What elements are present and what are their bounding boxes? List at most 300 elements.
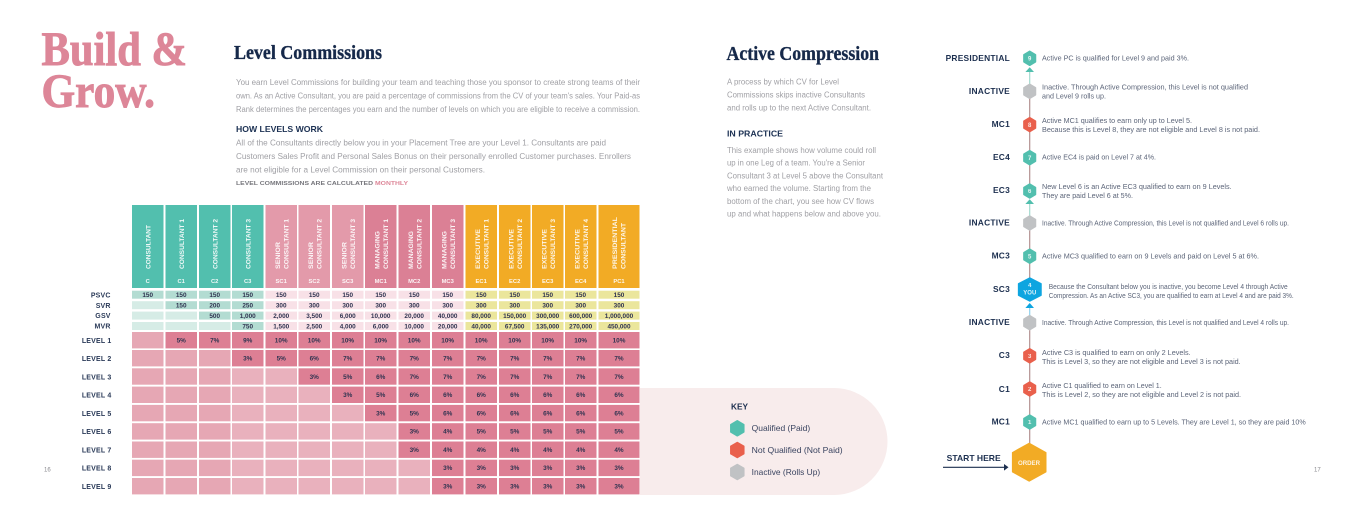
row: level 2: 7% xyxy=(477,356,486,362)
row: level 1: 9% xyxy=(243,338,253,344)
row: MVR: 270,000 xyxy=(569,323,593,330)
row: level 5: 6% xyxy=(543,410,553,417)
step: MC1 level 8 xyxy=(992,118,1260,134)
row: level 2: 7% xyxy=(443,356,453,362)
row: level 6: 4% xyxy=(443,429,453,436)
row: level 3: 7% xyxy=(543,374,553,381)
text block: how levels work: Customers Sales Profit and Personal Sales Bonus on their personally enrolled Customer purchases. Enrollers xyxy=(236,152,631,161)
row: level 2 xyxy=(82,350,640,366)
key item: qualified: Qualified (Paid) xyxy=(752,424,810,433)
key item: inactive: Inactive (Rolls Up) xyxy=(752,468,820,477)
row: level 1: 10% xyxy=(374,338,387,344)
text block: in practice: bottom of the chart, you see how CV flows xyxy=(727,197,874,206)
row: SVR xyxy=(96,301,639,310)
row: level 1: 10% xyxy=(613,338,626,344)
step: inactive above level 5: INACTIVE xyxy=(969,218,1010,228)
row: PSVC xyxy=(91,291,639,300)
row: MVR: MVR xyxy=(95,324,111,331)
key item: not qualified: Not Qualified (Not Paid) xyxy=(752,446,843,455)
row: level 3: 7% xyxy=(443,374,453,381)
row: SVR: 300 xyxy=(614,302,625,310)
key item: qualified xyxy=(731,421,810,436)
row: PSVC: 150 xyxy=(276,292,287,299)
step: SC3 you level 4: YOU xyxy=(1023,290,1036,296)
icon: order hexagon xyxy=(1012,443,1046,481)
step: MC3 level 5: Active MC3 qualified to earn on 9 Levels and paid on Level 5 at 6%. xyxy=(1042,254,1259,261)
row: level 7: 4% xyxy=(510,447,520,454)
icon: order hexagon: ORDER xyxy=(1018,460,1040,467)
row: GSV: 300,000 xyxy=(536,313,560,320)
row: PSVC: 150 xyxy=(409,292,420,299)
row: level 7: 4% xyxy=(443,447,453,454)
step: C1 level 2: 2 xyxy=(1028,387,1032,393)
row: level 7: 3% xyxy=(410,447,419,454)
step: inactive above level 8 xyxy=(969,84,1248,100)
row: GSV: 1,000 xyxy=(240,313,256,320)
table header row: CONSULTANT 1 xyxy=(284,219,290,269)
row: level 3: 5% xyxy=(343,374,353,381)
row: level 1: 10% xyxy=(475,338,488,344)
start here label and arrow: START HERE xyxy=(947,454,1001,463)
table header row: MANAGING xyxy=(408,231,415,269)
row: level 7: 4% xyxy=(576,447,586,454)
table header row: MC3 xyxy=(442,279,455,285)
row: level 1: 10% xyxy=(541,338,554,344)
row: level 5 xyxy=(82,405,640,421)
page number 16: 16 xyxy=(44,468,51,474)
row: SVR: 300 xyxy=(276,302,287,310)
row: PSVC: 150 xyxy=(176,292,187,299)
step: SC3 you level 4: Because the Consultant below you is inactive, you become Level 4 through Active xyxy=(1049,284,1288,291)
table header row: PC1 xyxy=(613,279,625,285)
arrow: blue below you xyxy=(1025,303,1034,308)
table header row: CONSULTANT 3 xyxy=(350,219,357,269)
row: MVR: 67,500 xyxy=(505,323,525,330)
note: calculated monthly: MONTHLY xyxy=(375,181,408,187)
text block: active compression intro: A process by which CV for Level xyxy=(727,78,839,87)
row: level 9 xyxy=(82,478,640,494)
title: Build & xyxy=(42,24,187,76)
table header row: SC1 xyxy=(276,279,288,285)
table header row xyxy=(132,205,640,288)
row: level 2: 5% xyxy=(277,356,286,362)
row: GSV: 40,000 xyxy=(438,313,458,320)
table header row: EXECUTIVE xyxy=(508,229,516,269)
row: level 3: 7% xyxy=(576,374,586,381)
row: MVR: 750 xyxy=(242,323,253,330)
step: EC3 level 6: They are paid Level 6 at 5%. xyxy=(1042,193,1133,200)
title: Grow. xyxy=(42,66,155,118)
text block: level commissions intro: Rank determines the percentages you earn and the number of levels on which you are eligible to receive a commission. xyxy=(236,105,640,114)
start here label and arrow xyxy=(943,454,1008,471)
row: level 6: 5% xyxy=(614,429,624,436)
row: level 4: 6% xyxy=(477,392,486,399)
row: level 2: 6% xyxy=(310,356,319,362)
step: MC1 level 8: MC1 xyxy=(992,119,1010,129)
row: PSVC: 150 xyxy=(242,292,253,299)
text block: in practice: up in one Leg of a team. You're a Senior xyxy=(727,159,865,168)
row: level 2: 3% xyxy=(243,356,253,362)
timeline connector lines xyxy=(1029,70,1031,445)
table header row: CONSULTANT 2 xyxy=(416,219,424,269)
row: level 2: 7% xyxy=(376,356,386,362)
row: level 6 xyxy=(82,423,640,440)
row: SVR: 300 xyxy=(342,302,353,310)
text block: in practice: This example shows how volume could roll xyxy=(727,146,876,155)
row: level 9: 3% xyxy=(543,483,553,490)
step: EC4 level 7 xyxy=(993,151,1156,165)
row: GSV xyxy=(95,312,639,320)
row: level 4: 5% xyxy=(376,392,386,399)
step: inactive above level 5 xyxy=(969,216,1289,230)
row: level 7: 4% xyxy=(614,447,624,454)
row: level 2: 7% xyxy=(343,356,353,362)
step: presidential level 9 xyxy=(946,51,1189,65)
row: level 4: 3% xyxy=(343,392,353,399)
row: level 7: 4% xyxy=(477,447,486,454)
row: PSVC: 150 xyxy=(442,292,453,299)
step: MC3 level 5 xyxy=(992,249,1259,263)
row: level 5: 6% xyxy=(614,410,624,417)
step: MC1 level 1: MC1 xyxy=(992,417,1010,427)
row: level 4: 6% xyxy=(443,392,453,399)
table header row: SC3 xyxy=(342,279,354,285)
table header row: CONSULTANT 3 xyxy=(550,219,557,269)
row: level 2: 7% xyxy=(410,356,419,362)
table header row: C3 xyxy=(244,279,252,285)
row: GSV: 500 xyxy=(209,313,220,320)
row: level 3: 7% xyxy=(614,374,624,381)
row: level 4: 6% xyxy=(543,392,553,399)
table header row: SENIOR xyxy=(342,242,348,269)
table header row: PRESIDENTIAL xyxy=(612,217,619,269)
chart: rank table xyxy=(82,205,640,494)
row: level 1: 10% xyxy=(508,338,521,344)
row: level 4: 6% xyxy=(614,392,624,399)
row: level 9: 3% xyxy=(576,483,586,490)
table header row: C xyxy=(146,279,151,285)
step: MC3 level 5: 5 xyxy=(1028,254,1032,260)
step: MC1 level 8: 8 xyxy=(1028,123,1032,129)
step: C3 level 3: 3 xyxy=(1028,354,1032,360)
table header row: EC3 xyxy=(542,279,554,285)
row: level 1: 10% xyxy=(341,338,354,344)
table header row: CONSULTANT 1 xyxy=(179,219,186,269)
row: level 2: 7% xyxy=(510,356,520,362)
text block: level commissions intro: You earn Level Commissions for building your team and teaching those you sponsor to create strong teams of their xyxy=(236,78,640,87)
text block: how levels work xyxy=(236,138,631,174)
row: level 5: 3% xyxy=(376,410,386,417)
step: EC3 level 6: New Level 6 is an Active EC3 qualified to earn on 9 Levels. xyxy=(1042,184,1232,191)
step: C3 level 3: C3 xyxy=(999,350,1010,360)
row: level 2: 7% xyxy=(543,356,553,362)
row: PSVC: 150 xyxy=(575,292,586,299)
row: level 1: LEVEL 1 xyxy=(82,338,112,345)
step: inactive above level 3 xyxy=(969,316,1289,330)
row: level 2: LEVEL 2 xyxy=(82,356,112,363)
text block: active compression intro xyxy=(727,78,871,112)
heading: level commissions: Level Commissions xyxy=(234,42,382,64)
heading: in practice: IN PRACTICE xyxy=(727,130,784,138)
row: SVR: 250 xyxy=(242,302,253,310)
table header row: CONSULTANT 3 xyxy=(450,219,457,269)
row: MVR: 2,500 xyxy=(306,323,323,330)
table header row: C1 xyxy=(177,279,186,285)
step: MC3 level 5: MC3 xyxy=(992,250,1010,260)
row: PSVC: 150 xyxy=(375,292,386,299)
row: PSVC: 150 xyxy=(542,292,553,299)
row: level 8: 3% xyxy=(543,465,553,472)
row: SVR: 200 xyxy=(209,302,220,310)
page number 17: 17 xyxy=(1314,468,1321,474)
heading: how levels work: HOW LEVELS WORK xyxy=(236,125,323,134)
table header row: MC2 xyxy=(408,279,420,285)
row: level 4: 6% xyxy=(410,392,419,399)
row: SVR: 300 xyxy=(476,302,487,310)
step: SC3 you level 4: SC3 xyxy=(993,284,1010,294)
step: SC3 you level 4: 4 xyxy=(1028,283,1032,289)
chart: compression timeline xyxy=(943,51,1306,481)
step: inactive above level 8: Inactive. Through Active Compression, this Level is not qualified xyxy=(1042,84,1248,92)
row: GSV: 150,000 xyxy=(503,313,527,320)
table header row: MANAGING xyxy=(374,231,382,269)
table header row: MANAGING xyxy=(442,231,448,269)
note: calculated monthly: LEVEL COMMISSIONS ARE CALCULATED xyxy=(236,181,373,187)
row: level 9: 3% xyxy=(614,483,624,490)
row: level 7: 4% xyxy=(543,447,553,454)
table header row: EC2 xyxy=(509,279,520,285)
row: level 7 xyxy=(82,442,640,458)
row: MVR: 450,000 xyxy=(607,323,631,330)
row: MVR: 4,000 xyxy=(340,323,356,330)
row: level 1 xyxy=(82,332,640,348)
step: C1 level 2: This is Level 2, so they are not eligible and Level 2 is not paid. xyxy=(1042,392,1241,399)
row: level 1: 10% xyxy=(574,338,587,344)
row: PSVC: PSVC xyxy=(91,293,111,300)
row: level 3: 7% xyxy=(510,374,520,381)
row: level 8: 3% xyxy=(443,465,453,472)
table header row: CONSULTANT 3 xyxy=(246,219,252,269)
row: GSV: 6,000 xyxy=(340,313,356,320)
row: level 6: 5% xyxy=(477,429,486,436)
row: GSV: 1,000,000 xyxy=(605,313,634,320)
row: level 8: 3% xyxy=(614,465,624,472)
row: SVR: 300 xyxy=(375,302,386,310)
row: PSVC: 150 xyxy=(209,292,220,299)
row: SVR: 300 xyxy=(409,302,420,310)
row: GSV: 20,000 xyxy=(404,313,424,320)
table header row: MC1 xyxy=(375,279,388,285)
step: C1 level 2: C1 xyxy=(999,384,1010,394)
text block: active compression intro: and rolls up to the next Active Consultant. xyxy=(727,103,871,112)
table header row: EC1 xyxy=(476,279,488,285)
step: inactive above level 3: Inactive. Through Active Compression, this Level is not qualified and Level 4 rolls up. xyxy=(1042,320,1289,327)
row: level 3: LEVEL 3 xyxy=(82,374,112,381)
row: PSVC: 150 xyxy=(342,292,353,299)
table header row: EXECUTIVE xyxy=(542,229,548,269)
row: level 9: 3% xyxy=(443,483,453,490)
step: MC1 level 1 xyxy=(992,415,1306,429)
step: C3 level 3: Active C3 is qualified to earn on only 2 Levels. xyxy=(1042,350,1191,357)
row: level 1: 10% xyxy=(408,338,421,344)
step: inactive above level 8: INACTIVE xyxy=(969,86,1010,96)
row: level 5: 6% xyxy=(510,410,520,417)
row: level 3: 3% xyxy=(310,374,319,381)
row: MVR: 20,000 xyxy=(438,323,458,330)
step: presidential level 9: Active PC is qualified for Level 9 and paid 3%. xyxy=(1042,56,1189,62)
row: SVR: SVR xyxy=(96,303,111,310)
table header row: CONSULTANT 4 xyxy=(583,219,590,269)
row: level 6: 5% xyxy=(576,429,586,436)
row: SVR: 300 xyxy=(542,302,553,310)
row: level 9: LEVEL 9 xyxy=(82,484,112,491)
note: calculated monthly xyxy=(236,181,408,187)
row: SVR: 300 xyxy=(309,302,320,310)
row: level 3: 7% xyxy=(410,374,419,381)
step: SC3 you level 4 xyxy=(993,278,1294,301)
row: level 5: 6% xyxy=(576,410,586,417)
row: level 1: 10% xyxy=(308,338,321,344)
row: level 5: 5% xyxy=(410,410,419,417)
row: level 4: 6% xyxy=(510,392,520,399)
title xyxy=(42,24,187,118)
row: GSV: 600,000 xyxy=(569,313,593,320)
key heading: KEY xyxy=(731,402,749,412)
step: inactive above level 8: and Level 9 rolls up. xyxy=(1042,94,1106,100)
text block: in practice: up and what happens below and above you. xyxy=(727,210,881,219)
step: presidential level 9: 9 xyxy=(1028,56,1032,62)
row: SVR: 150 xyxy=(176,302,187,310)
row: PSVC: 150 xyxy=(309,292,320,299)
row: level 2: 7% xyxy=(614,356,624,362)
table header row: SENIOR xyxy=(275,242,282,269)
row: SVR: 300 xyxy=(442,302,453,310)
row: level 1: 10% xyxy=(275,338,288,344)
row: level 1: 10% xyxy=(441,338,454,344)
row: level 8: LEVEL 8 xyxy=(82,466,112,473)
row: GSV: 3,500 xyxy=(306,313,323,320)
row: PSVC: 150 xyxy=(142,292,153,299)
step: inactive above level 3: INACTIVE xyxy=(969,317,1010,327)
row: level 5: LEVEL 5 xyxy=(82,411,112,418)
key item: not qualified xyxy=(731,442,843,458)
row: level 6: 5% xyxy=(543,429,553,436)
row: PSVC: 150 xyxy=(476,292,487,299)
row: level 6: LEVEL 6 xyxy=(82,429,112,436)
row: SVR: 300 xyxy=(509,302,520,310)
row: GSV: 2,000 xyxy=(273,313,290,320)
step: C1 level 2 xyxy=(999,382,1241,399)
step: MC1 level 8: Because this is Level 8, they are not eligible and Level 8 is not paid. xyxy=(1042,127,1260,134)
table header row: EXECUTIVE xyxy=(574,229,582,269)
step: EC3 level 6: EC3 xyxy=(993,185,1010,195)
row: MVR: 135,000 xyxy=(536,323,560,330)
step: MC1 level 8: Active MC1 qualifies to earn only up to Level 5. xyxy=(1042,118,1192,125)
row: level 9: 3% xyxy=(510,483,520,490)
text block: in practice: Consultant 3 at Level 5 above the Consultant xyxy=(727,172,884,180)
row: level 4 xyxy=(82,387,640,403)
table header row: SENIOR xyxy=(308,242,315,269)
row: MVR: 1,500 xyxy=(273,323,290,330)
key item: inactive xyxy=(731,464,820,480)
row: level 3: 7% xyxy=(477,374,486,381)
heading: active compression: Active Compression xyxy=(726,43,879,65)
row: level 8 xyxy=(82,460,640,476)
row: level 4: 6% xyxy=(576,392,586,399)
step: EC3 level 6: 6 xyxy=(1028,189,1032,195)
row: level 5: 6% xyxy=(477,410,486,417)
step: SC3 you level 4: Compression. As an Active SC3, you are qualified to earn at Level 4 and are paid 3%. xyxy=(1049,293,1294,300)
row: level 6: 5% xyxy=(510,429,520,436)
panel: key xyxy=(640,388,887,495)
row: level 4: LEVEL 4 xyxy=(82,392,112,400)
text block: how levels work: All of the Consultants directly below you in your Placement Tree are your Level 1. Consultants are paid xyxy=(236,138,606,148)
table header row: CONSULTANT 2 xyxy=(316,219,324,269)
row: GSV: 10,000 xyxy=(371,313,391,320)
table header row: SC2 xyxy=(309,279,320,285)
text block: how levels work: are not eligible for a Level Commission on their personal Customers. xyxy=(236,166,485,174)
row: level 6: 3% xyxy=(410,429,419,436)
row: level 3 xyxy=(82,368,640,385)
row: GSV: 80,000 xyxy=(471,313,491,320)
row: level 9: 3% xyxy=(477,483,486,490)
table header row: CONSULTANT 2 xyxy=(212,219,220,269)
table header row: CONSULTANT 2 xyxy=(517,219,524,269)
step: MC1 level 1: Active MC1 qualified to earn up to 5 Levels. They are Level 1, so they are paid 10% xyxy=(1042,420,1306,427)
step: inactive above level 5: Inactive. Through Active Compression, this Level is not qualified and Level 6 rolls up. xyxy=(1042,220,1289,228)
row: PSVC: 150 xyxy=(509,292,520,299)
step: C1 level 2: Active C1 qualified to earn on Level 1. xyxy=(1042,383,1162,390)
table header row: CONSULTANT xyxy=(146,224,152,269)
table header row: EXECUTIVE xyxy=(475,229,482,269)
step: C3 level 3 xyxy=(999,349,1241,366)
table header row: EC4 xyxy=(575,279,587,285)
step: EC4 level 7: EC4 xyxy=(993,152,1010,162)
text block: in practice xyxy=(726,146,884,219)
row: PSVC: 150 xyxy=(614,292,625,299)
text block: active compression intro: Commissions skips inactive Consultants xyxy=(727,90,865,100)
step: EC4 level 7: Active EC4 is paid on Level 7 at 4%. xyxy=(1042,154,1156,161)
text block: in practice: who earned the volume. Starting from the xyxy=(726,184,872,193)
table header row: CONSULTANT xyxy=(620,222,628,269)
row: level 8: 3% xyxy=(576,465,586,472)
table header row: CONSULTANT 1 xyxy=(383,219,390,269)
row: level 8: 3% xyxy=(510,465,520,472)
row: level 2: 7% xyxy=(576,356,586,362)
table header row: C2 xyxy=(211,279,218,285)
row: level 7: LEVEL 7 xyxy=(82,447,112,454)
row: level 5: 6% xyxy=(443,410,453,417)
row: MVR: 10,000 xyxy=(404,323,424,330)
arrow: teal above level 5 inactive xyxy=(1025,199,1034,204)
table header row: CONSULTANT 1 xyxy=(484,219,490,269)
step: presidential level 9: PRESIDENTIAL xyxy=(946,53,1010,63)
row: GSV: GSV xyxy=(95,313,111,320)
row: MVR: 6,000 xyxy=(373,323,389,330)
step: C3 level 3: This is Level 3, so they are not eligible and Level 3 is not paid. xyxy=(1042,359,1241,366)
row: MVR: 40,000 xyxy=(471,323,491,330)
step: MC1 level 1: 1 xyxy=(1028,420,1032,426)
row: MVR xyxy=(95,322,639,331)
row: level 1: 5% xyxy=(177,338,186,344)
arrow: teal above inactive xyxy=(1025,67,1034,72)
row: level 8: 3% xyxy=(477,465,486,472)
row: SVR: 300 xyxy=(575,302,586,310)
step: EC4 level 7: 7 xyxy=(1028,156,1032,162)
text block: level commissions intro xyxy=(236,78,640,114)
text block: level commissions intro: own. As an Active Consultant, you are paid a percentage of commissions from the CV of your team's sales. Your Paid-as xyxy=(236,92,640,100)
row: level 3: 6% xyxy=(376,374,386,381)
